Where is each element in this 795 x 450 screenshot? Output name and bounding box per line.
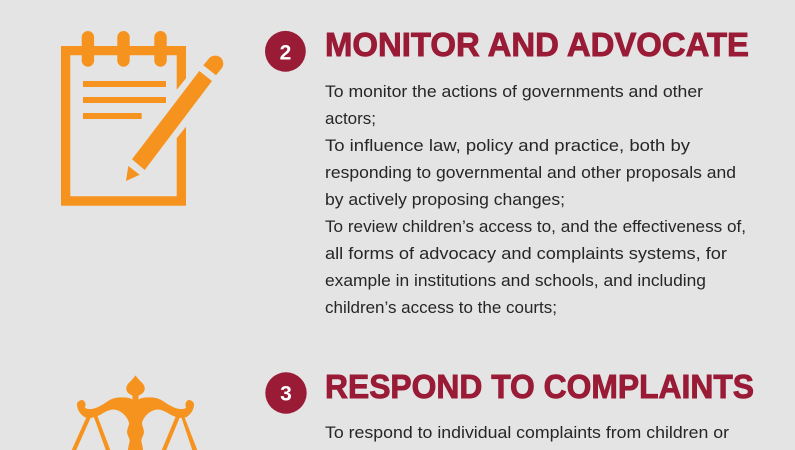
icon: scales of justice <box>72 376 197 450</box>
icon: notepad and pencil <box>61 31 223 206</box>
panel: monitor and advocate <box>61 27 749 317</box>
heading: respond to complaints: RESPOND TO COMPLAINTS <box>325 369 754 406</box>
text block: monitor and advocate description: by actively proposing changes; <box>325 190 565 209</box>
text block: monitor and advocate description: children’s access to the courts; <box>325 298 557 317</box>
number badge 2 <box>265 31 306 72</box>
number badge 2: 2 <box>280 41 291 64</box>
text block: monitor and advocate description: responding to governmental and other proposals and <box>325 163 736 182</box>
text block: respond to complaints description: To respond to individual complaints from children or <box>325 423 729 442</box>
text block: monitor and advocate description <box>325 82 746 317</box>
text block: monitor and advocate description: example in institutions and schools, and including <box>325 271 706 290</box>
text block: monitor and advocate description: To review children’s access to, and the effectiveness of, <box>325 217 746 236</box>
heading: monitor and advocate: MONITOR AND ADVOCATE <box>325 27 749 64</box>
number badge 3: 3 <box>280 382 292 405</box>
text block: monitor and advocate description: actors; <box>325 109 376 128</box>
text block: monitor and advocate description: To influence law, policy and practice, both by <box>325 136 691 155</box>
panel: respond to complaints <box>72 369 754 450</box>
number badge 3 <box>265 372 307 414</box>
text block: monitor and advocate description: all forms of advocacy and complaints systems, for <box>325 244 727 263</box>
text block: monitor and advocate description: To monitor the actions of governments and other <box>325 82 703 101</box>
